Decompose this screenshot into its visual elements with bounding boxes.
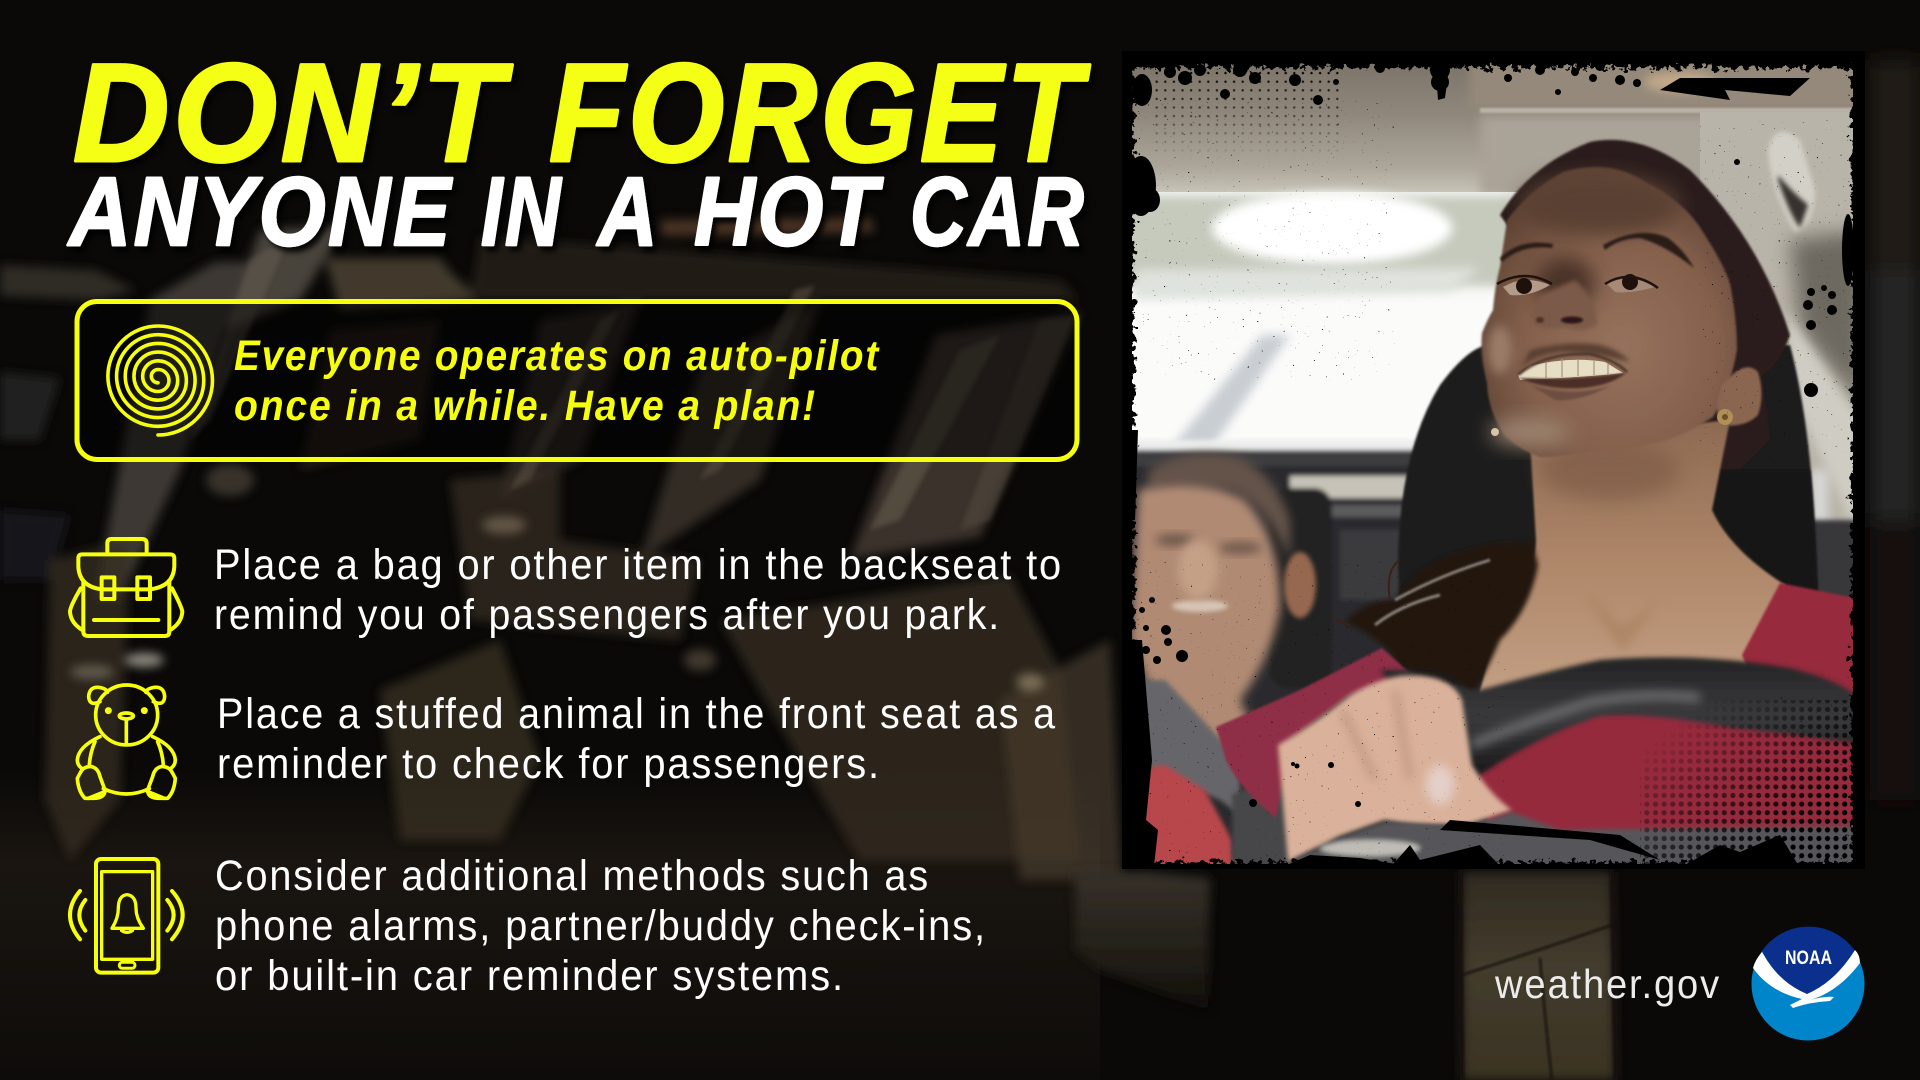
- icon: teddy bear: [77, 685, 175, 798]
- title line 1: [73, 34, 1091, 191]
- tip 3 text line 2: phone alarms, partner/buddy check-ins,: [215, 902, 987, 950]
- icon: phone alarm: [70, 859, 183, 973]
- rear interior of the car: [1132, 438, 1488, 862]
- title line 2: CAR: [910, 157, 1086, 266]
- ear and earring: [1717, 367, 1762, 426]
- halftone dots: [1150, 70, 1860, 870]
- photo: mother driving with child in back seat: [1122, 51, 1865, 869]
- callout text line 1: Everyone operates on auto-pilot: [234, 332, 880, 380]
- child face: [1130, 484, 1280, 760]
- driver neck: [1479, 420, 1786, 693]
- curly hair over shoulder: [1337, 542, 1538, 695]
- tip 1 text: Place a bag or other item in the backseat to: [214, 541, 1063, 589]
- tip 2: stuffed animal: [77, 685, 1057, 798]
- ink splatter: [1139, 60, 1837, 807]
- title line 2: ANYONE: [67, 157, 453, 266]
- tip 2 text: Place a stuffed animal in the front seat as a: [217, 690, 1057, 738]
- eyes: [1503, 280, 1550, 295]
- mustache shadow and mouth: [1520, 343, 1630, 370]
- driver hair: [1500, 140, 1790, 480]
- driver headrest: [1398, 345, 1818, 690]
- driver shirt: [1470, 583, 1865, 840]
- icon: spiral: [108, 326, 212, 435]
- driver face: [1482, 167, 1762, 457]
- NOAA wordmark: NOAA: [1785, 948, 1832, 969]
- child hair: [1148, 454, 1290, 560]
- bottom dashboard area: [1290, 812, 1865, 870]
- title line 1: FORGET: [549, 34, 1091, 191]
- tip 3: additional methods: [70, 852, 987, 1000]
- title line 2: [67, 157, 1086, 266]
- tip 3 text line 3: or built-in car reminder systems.: [215, 952, 845, 1000]
- tip 1 text line 2: remind you of passengers after you park.: [214, 591, 1001, 639]
- windshield view: [1132, 186, 1518, 444]
- eyebrows: [1500, 243, 1553, 262]
- right pillar and side window: [1700, 112, 1865, 612]
- steering wheel: [1380, 657, 1862, 778]
- title: [67, 34, 1091, 266]
- callout text line 2: once in a while. Have a plan!: [234, 382, 817, 430]
- title line 2: A: [596, 157, 660, 266]
- black grunge frame: [1122, 51, 1865, 869]
- grunge specks: [1130, 100, 1850, 860]
- title line 1: DON’T: [73, 34, 513, 191]
- weather.gov label: weather.gov: [1494, 961, 1721, 1007]
- child shirt: [1146, 762, 1234, 864]
- ceiling and sun visor: [1132, 63, 1852, 192]
- tip 1: bag in backseat: [70, 539, 1063, 639]
- nose: [1532, 280, 1597, 330]
- logo: NOAA: [1752, 927, 1864, 1040]
- tip 3 text: Consider additional methods such as: [215, 852, 930, 900]
- tip 2 text line 2: reminder to check for passengers.: [217, 740, 881, 788]
- title line 2: HOT: [694, 157, 884, 266]
- child in back seat: [1130, 454, 1316, 870]
- sleeve: [1216, 648, 1412, 818]
- title line 2: IN: [481, 157, 563, 266]
- callout: have a plan: [77, 302, 1077, 460]
- icon: backpack: [70, 539, 182, 636]
- hand on the wheel: [1278, 676, 1512, 862]
- seat belt: [1146, 678, 1242, 811]
